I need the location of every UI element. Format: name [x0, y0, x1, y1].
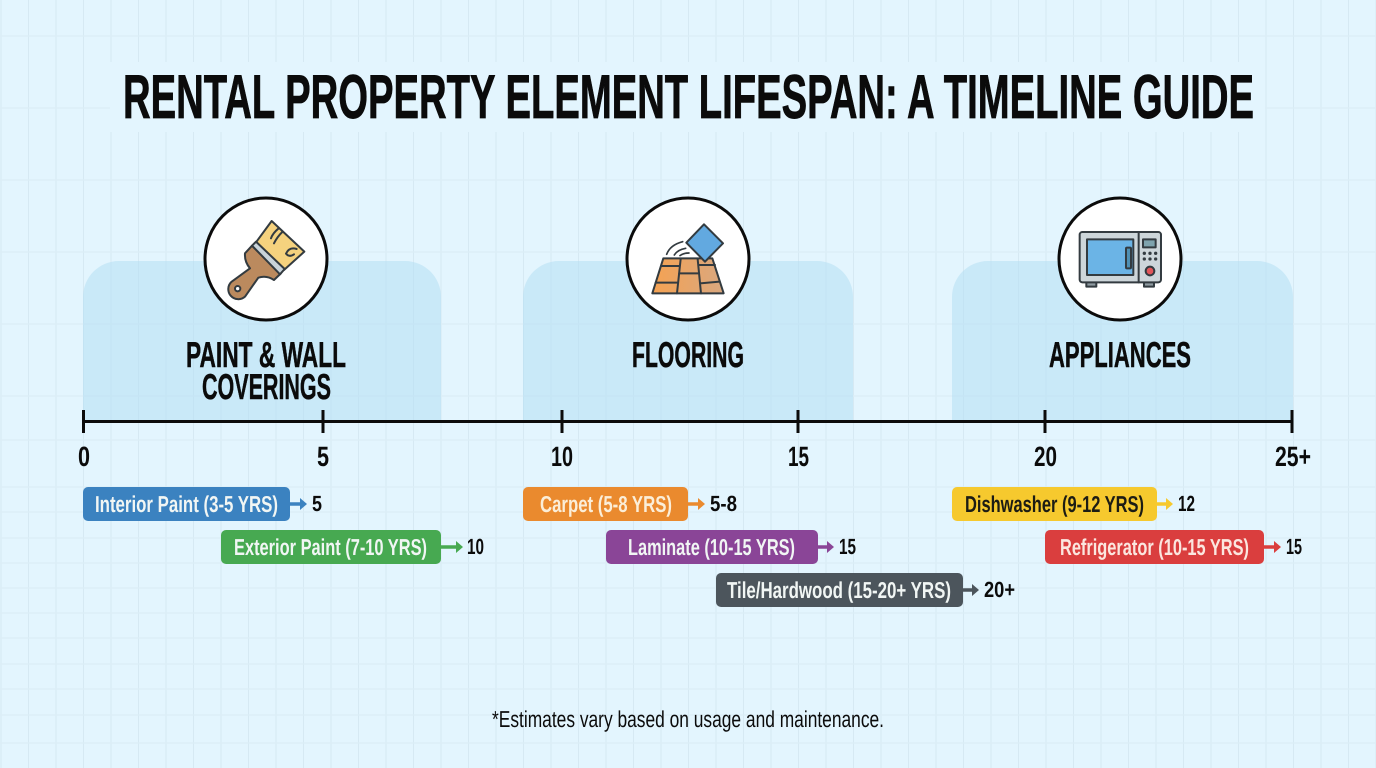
heading: paint and wall coverings: COVERINGS: [202, 366, 331, 407]
bar: dishwasher: [952, 487, 1195, 521]
timeline axis: [78, 410, 1311, 472]
timeline axis: 5: [317, 441, 329, 472]
heading: flooring: FLOORING: [632, 334, 744, 375]
timeline axis: 0: [78, 441, 90, 472]
bar: laminate: Laminate (10-15 YRS): [628, 534, 795, 560]
bar: interior paint: [83, 487, 322, 521]
heading: appliances: APPLIANCES: [1049, 334, 1191, 375]
icon: paint brush: [205, 198, 327, 320]
panel: appliances: [952, 198, 1293, 420]
timeline axis: 10: [551, 441, 573, 472]
bar: interior paint: Interior Paint (3-5 YRS): [95, 491, 278, 517]
bar: dishwasher: Dishwasher (9-12 YRS): [965, 491, 1144, 517]
footnote: *Estimates vary based on usage and maintenance.: [492, 706, 884, 732]
bar: tile and hardwood: Tile/Hardwood (15-20+ YRS): [727, 577, 951, 603]
bar: laminate: 15: [839, 534, 856, 559]
timeline axis: 25+: [1275, 441, 1311, 472]
heading: paint and wall coverings: PAINT & WALL: [186, 334, 346, 375]
bar: carpet: Carpet (5-8 YRS): [540, 491, 672, 517]
heading: paint and wall coverings: [186, 334, 346, 407]
bar: exterior paint: 10: [467, 534, 484, 559]
bar: carpet: [523, 487, 737, 521]
bar: tile and hardwood: 20+: [984, 577, 1015, 602]
bar: interior paint: 5: [312, 491, 322, 516]
icon: microwave: [1059, 198, 1181, 320]
bar: carpet: 5-8: [710, 491, 737, 516]
bar: refrigerator: [1045, 530, 1302, 564]
bar: exterior paint: [221, 530, 484, 564]
timeline axis: 15: [788, 441, 809, 472]
bar: laminate: [606, 530, 856, 564]
icon: floor tiles: [627, 198, 749, 320]
timeline axis: 20: [1034, 441, 1057, 472]
bar: refrigerator: Refrigerator (10-15 YRS): [1060, 534, 1249, 560]
panel: paint and wall coverings: [83, 198, 441, 420]
bar: refrigerator: 15: [1286, 534, 1302, 559]
bar: exterior paint: Exterior Paint (7-10 YRS): [234, 534, 427, 560]
bar: dishwasher: 12: [1178, 491, 1195, 516]
panel: flooring: [523, 198, 853, 420]
